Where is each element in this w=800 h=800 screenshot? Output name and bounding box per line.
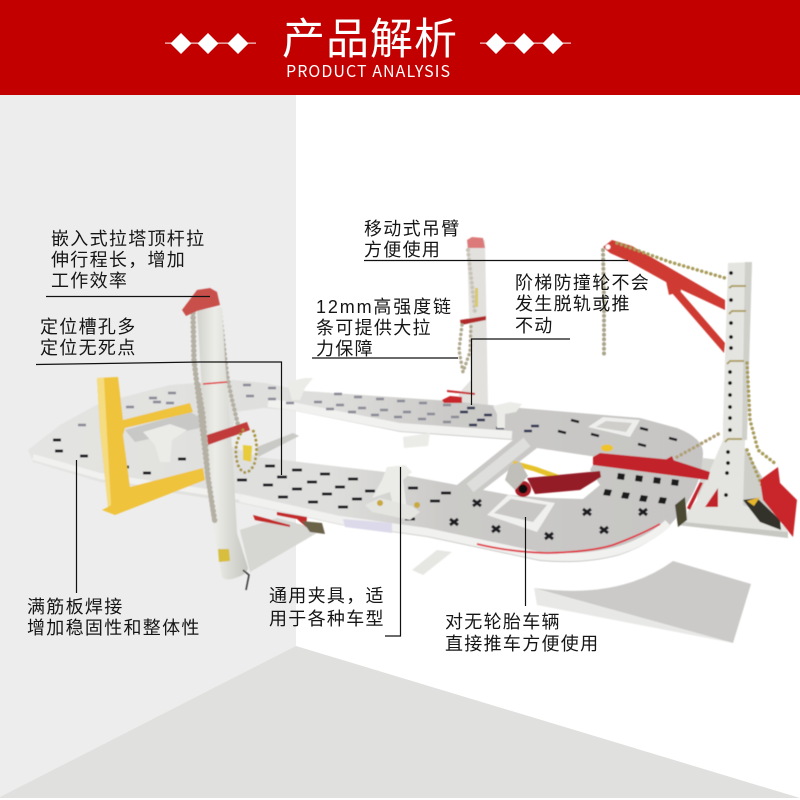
- callout: ramp: 对无轮胎车辆: [445, 612, 561, 632]
- underside red brace: [253, 512, 325, 534]
- clamps: [143, 378, 522, 520]
- left diamond ornament: [165, 33, 256, 54]
- rear tray on platform: [588, 417, 640, 437]
- callout: universal clamp: 通用夹具，适: [269, 586, 385, 606]
- callout: chain: 力保障: [316, 339, 374, 359]
- rear red block: [743, 467, 797, 537]
- pillar red band: [207, 422, 250, 445]
- red stripe on round end: [477, 524, 660, 553]
- anti-collision base under rear: [412, 550, 452, 575]
- callout: step wheel: 不动: [515, 316, 554, 336]
- gripper marks: [377, 500, 420, 508]
- callout: boom lift: 方便使用: [364, 240, 441, 260]
- background wall: [0, 95, 296, 798]
- pillar base support: [240, 518, 322, 572]
- platform rims: [33, 403, 668, 557]
- main platform: [28, 380, 703, 562]
- callout: ramp: [445, 517, 599, 654]
- red horizontal puller: [593, 444, 718, 510]
- callout: ramp: 直接推车方便使用: [445, 634, 599, 654]
- callout: positioning slots: 定位槽孔多: [40, 317, 136, 337]
- yellow L frame: [97, 377, 205, 515]
- floor jack: [505, 462, 601, 497]
- brand label: [343, 519, 392, 533]
- rear rail slots: [78, 385, 539, 431]
- background floor: [0, 646, 800, 798]
- callout: positioning slots: 定位无死点: [40, 338, 136, 358]
- callout: step wheel: [472, 273, 650, 405]
- callout: chain: 12mm高强度链: [316, 297, 453, 317]
- callout: boom lift: [364, 219, 628, 260]
- right diamond ornament: [480, 33, 571, 54]
- title: 产品解析: [282, 16, 458, 64]
- callout: welded plate: 满筋板焊接: [27, 597, 124, 617]
- callout: chain: [312, 297, 458, 359]
- square holes: [603, 473, 679, 504]
- red boom arm: [603, 240, 725, 353]
- tower holes: [724, 271, 733, 497]
- back tower post: [458, 237, 488, 405]
- callout: step wheel: 阶梯防撞轮不会: [515, 273, 650, 293]
- callout: chain: 条可提供大拉: [316, 318, 432, 338]
- pillar red cap: [182, 288, 220, 316]
- callout: welded plate: 增加稳固性和整体性: [27, 618, 201, 638]
- rear pillar chain: [193, 312, 238, 522]
- callout: tower top rod: 嵌入式拉塔顶杆拉: [51, 229, 205, 249]
- callout: welded plate: [27, 460, 201, 638]
- callout: universal clamp: 用于各种车型: [269, 609, 385, 629]
- frame machine illustration: [28, 237, 797, 643]
- inner shadow under tail: [125, 412, 205, 442]
- callout: boom lift: 移动式吊臂: [364, 219, 460, 239]
- loading ramp: [534, 561, 751, 643]
- pillar chain front: [198, 385, 215, 522]
- callout: tower top rod: 伸行程长，增加: [51, 250, 186, 270]
- gold chain loop: [236, 428, 257, 472]
- subtitle: PRODUCT ANALYSIS: [286, 58, 450, 82]
- cross slots: [450, 500, 647, 539]
- boom chains: [603, 243, 777, 488]
- header banner: [0, 0, 800, 95]
- right tower: [677, 262, 788, 538]
- red bits on rear rail: [442, 390, 475, 403]
- callout: tower top rod: [46, 229, 210, 296]
- platform slots: [53, 420, 677, 539]
- tower hooks: [725, 286, 746, 442]
- gripper clamp: [675, 497, 687, 527]
- pillar body: [197, 307, 248, 580]
- callout: tower top rod: 工作效率: [51, 271, 128, 291]
- callout: step wheel: 发生脱轨或推: [515, 294, 631, 314]
- callout: universal clamp: [269, 467, 400, 636]
- ramp tray on platform: [487, 495, 555, 532]
- callout: positioning slots: [36, 317, 282, 475]
